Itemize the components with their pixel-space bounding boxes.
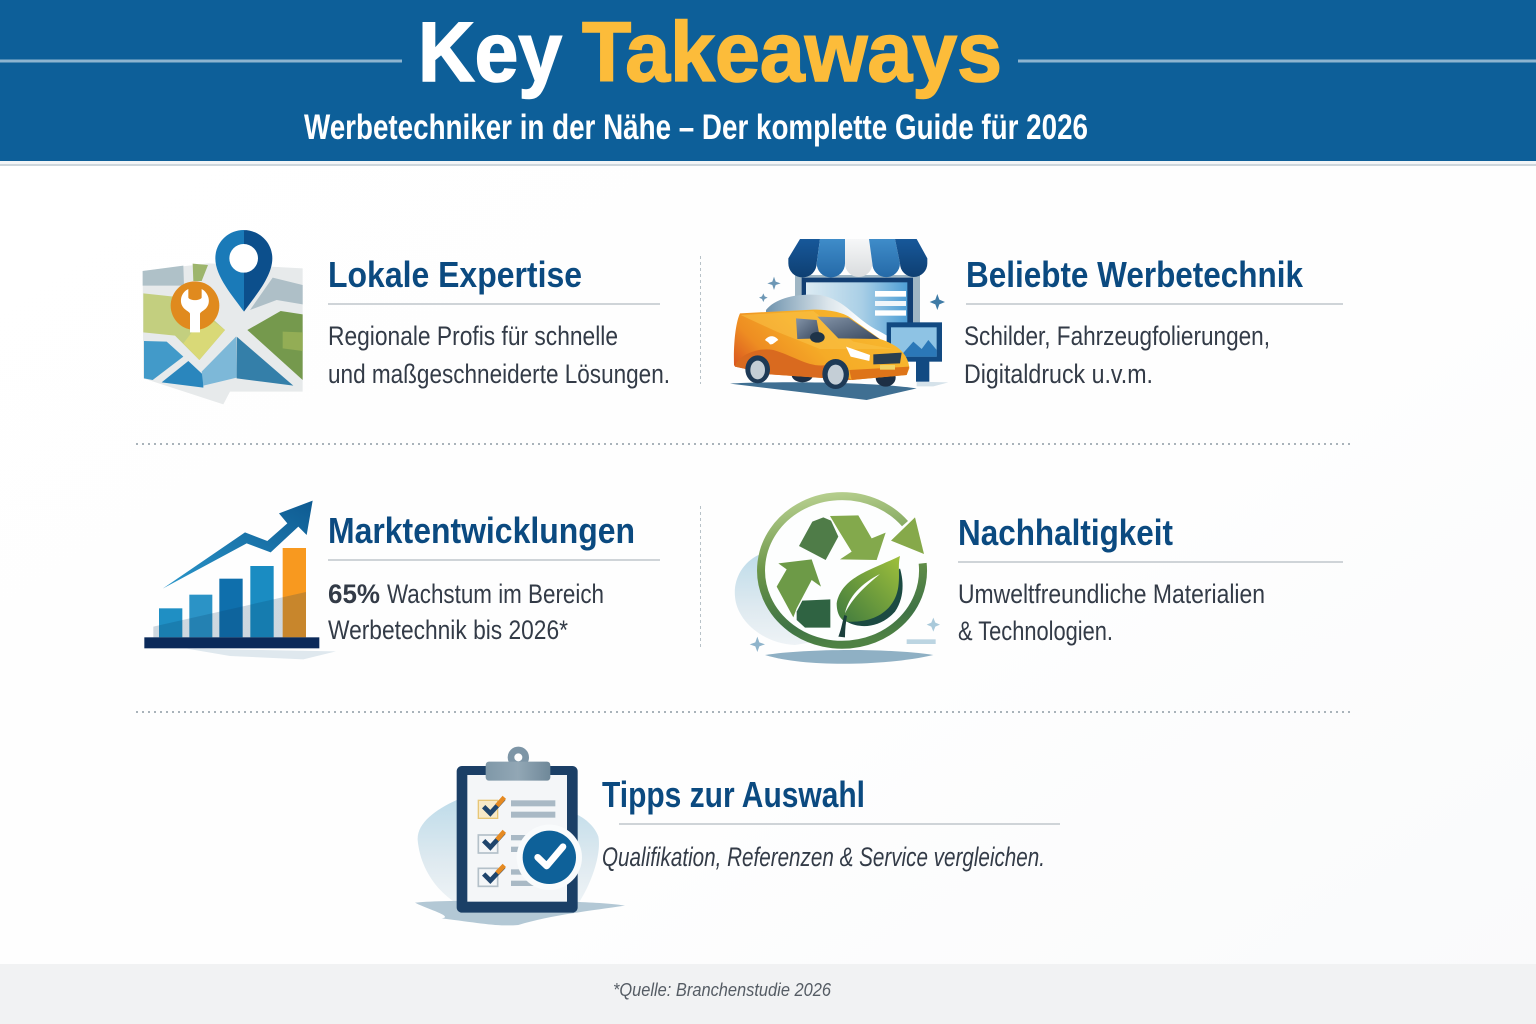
body text (328, 321, 670, 389)
subtitle: Werbetechniker in der Nähe – Der komplette Guide für 2026 (304, 108, 1088, 147)
body text: Umweltfreundliche Materialien (958, 579, 1265, 609)
icon: map with pin and wrench (143, 230, 303, 404)
body text (964, 321, 1270, 389)
heading: Marktentwicklungen (328, 510, 635, 551)
body text: Digitaldruck u.v.m. (964, 359, 1153, 389)
heading: Lokale Expertise (328, 254, 582, 295)
icon: recycling symbol with leaf (735, 496, 940, 664)
body text: & Technologien. (958, 616, 1113, 646)
body text: und maßgeschneiderte Lösungen. (328, 359, 670, 389)
panel: Nachhaltigkeit (735, 496, 1343, 664)
panel: Lokale Expertise (143, 230, 670, 404)
footnote: *Quelle: Branchenstudie 2026 (613, 980, 832, 1000)
divider: vertical top (700, 256, 702, 384)
title: Takeaways (582, 5, 1002, 99)
divider: vertical middle (700, 506, 702, 648)
header band (0, 0, 1536, 166)
panel: Beliebte Werbetechnik (730, 239, 1343, 400)
body text: Werbetechnik bis 2026* (328, 615, 568, 645)
heading: Tipps zur Auswahl (602, 774, 865, 815)
panel: Marktentwicklungen (144, 501, 660, 659)
heading: Nachhaltigkeit (958, 512, 1173, 553)
body text: 65% (328, 579, 380, 609)
divider: row 2 (136, 711, 1350, 713)
divider: row 1 (136, 443, 1350, 445)
title: Key (418, 5, 562, 99)
icon: growth bar chart with arrow (144, 501, 336, 659)
icon: shop and van (730, 239, 948, 400)
body text: Wachstum im Bereich (387, 579, 604, 609)
panel: Tipps zur Auswahl (415, 750, 1060, 925)
heading: Beliebte Werbetechnik (966, 254, 1304, 295)
icon: clipboard checklist (415, 750, 625, 925)
body text: Qualifikation, Referenzen & Service vergleichen. (602, 842, 1045, 872)
body text: Schilder, Fahrzeugfolierungen, (964, 321, 1270, 351)
body text: Regionale Profis für schnelle (328, 321, 618, 351)
footer band (0, 964, 1536, 1024)
body text (328, 579, 604, 645)
body text (958, 579, 1265, 646)
